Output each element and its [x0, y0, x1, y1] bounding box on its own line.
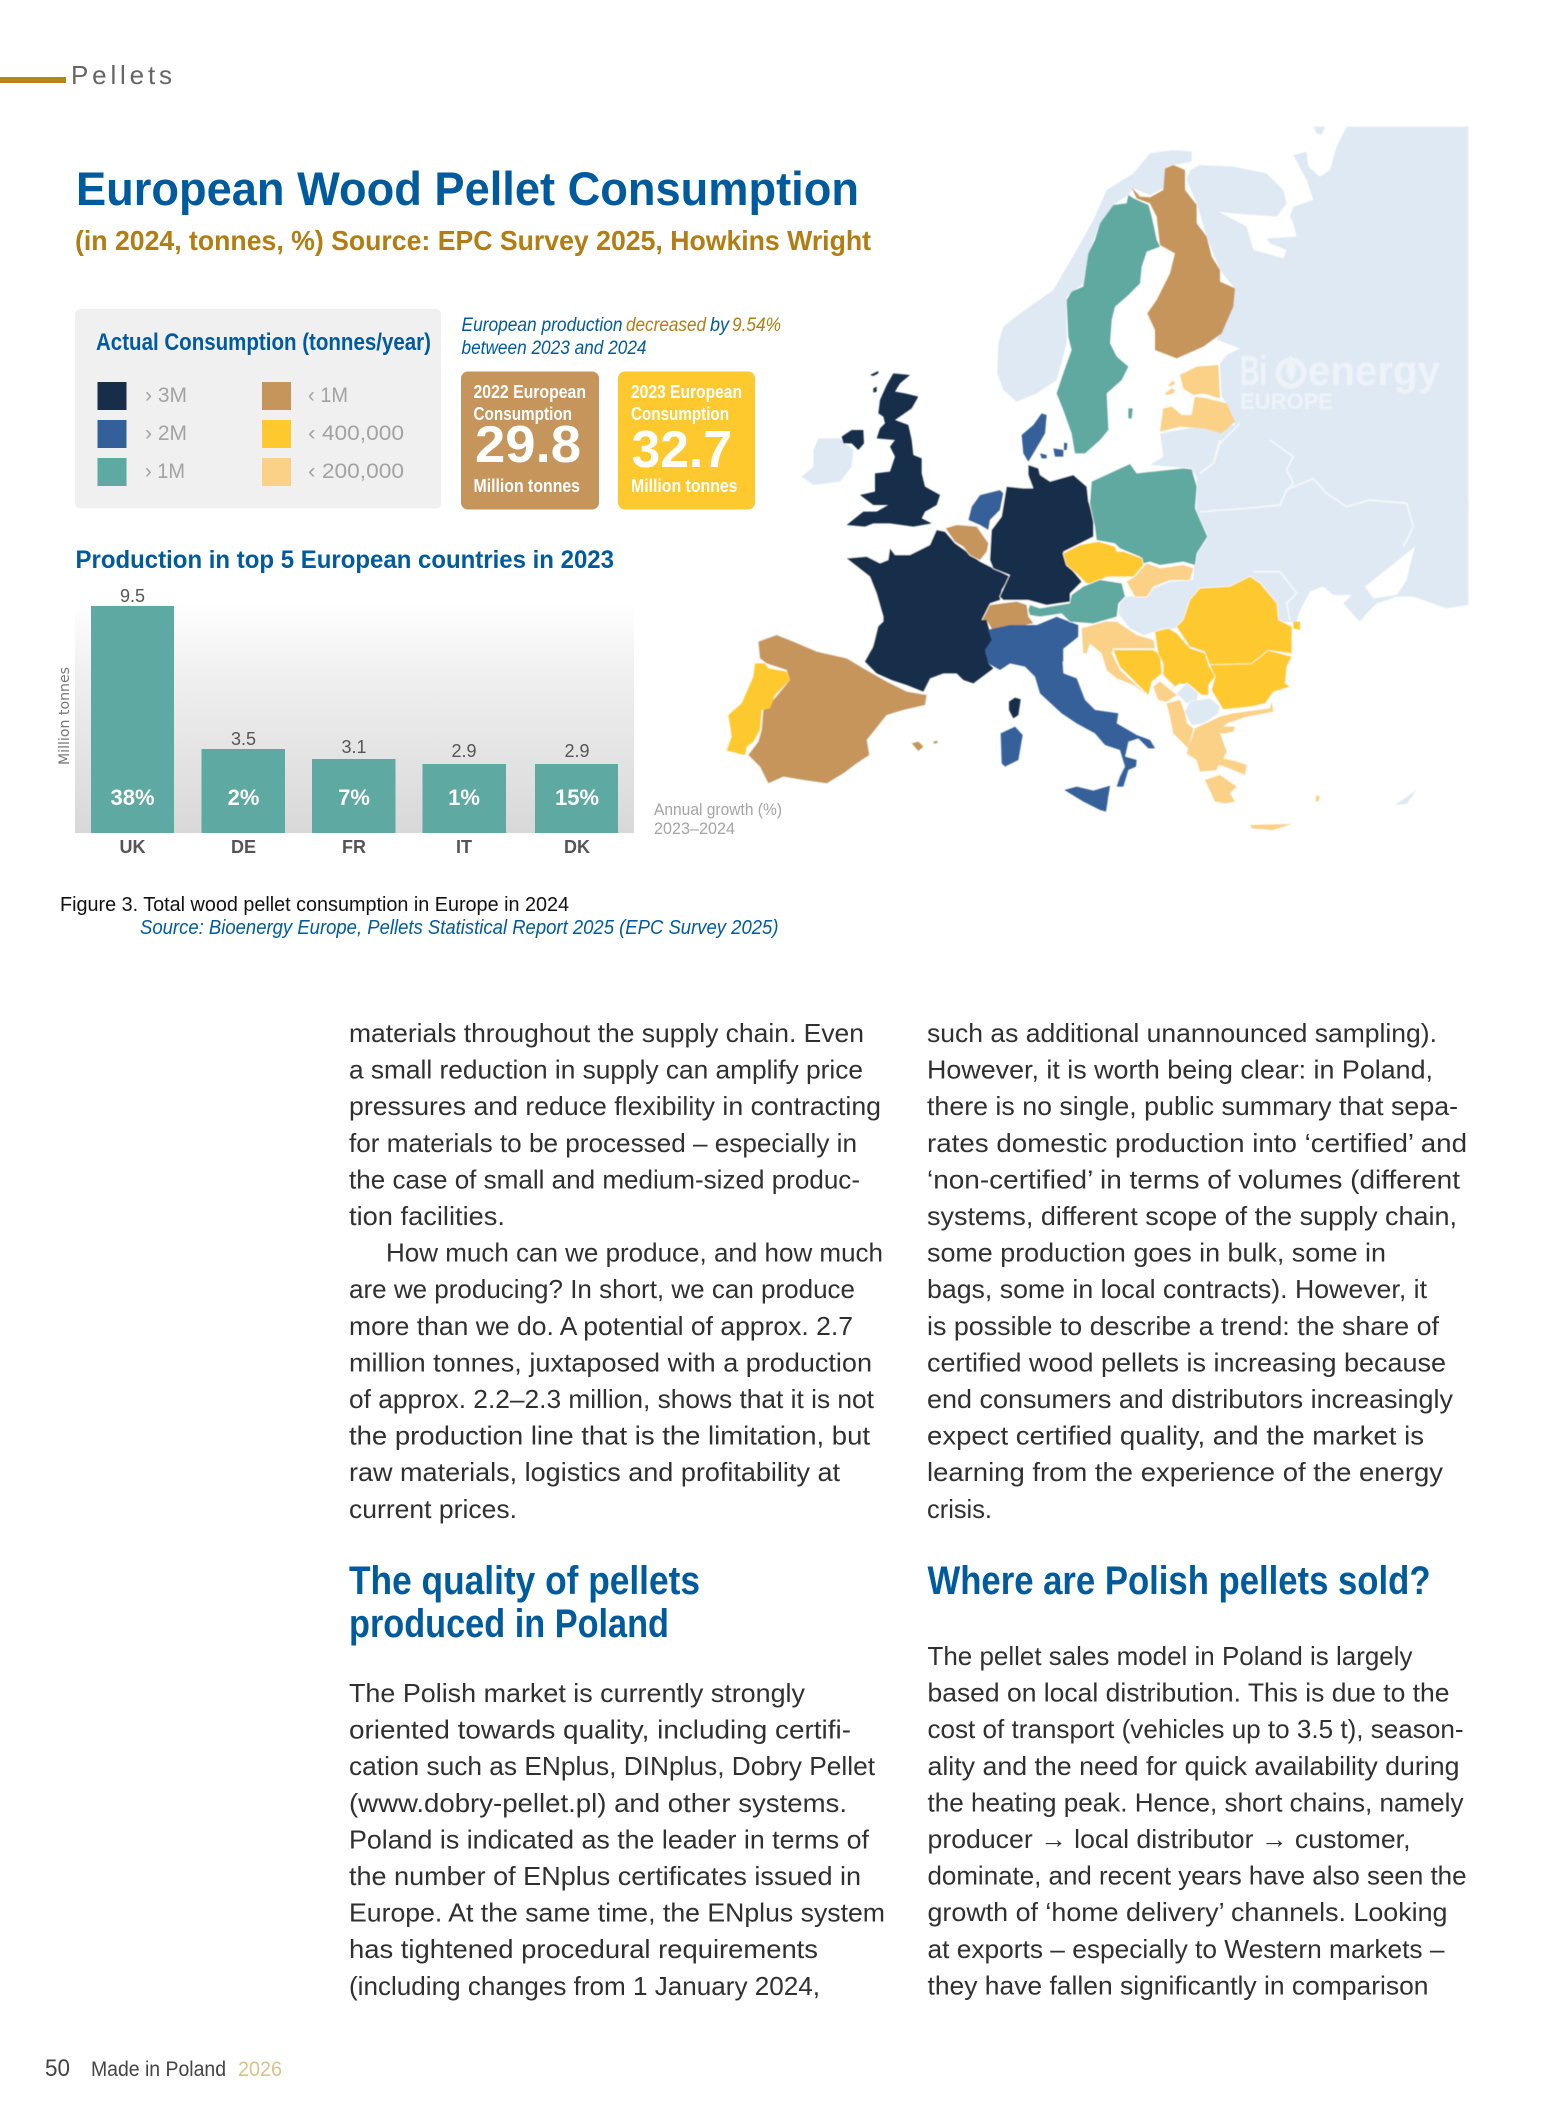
- text block: left column bottom: has tightened procedural requirements: [349, 1934, 818, 1964]
- legend item: under 200,000: [262, 458, 404, 486]
- country: Netherlands: [968, 490, 1003, 530]
- legend item: over 3M: [98, 382, 187, 410]
- text block: right column bottom: at exports – especially to Western markets –: [928, 1934, 1445, 1964]
- page footer: [45, 2055, 282, 2082]
- subtitle: (in 2024, tonnes, %) Source: EPC Survey 2025, Howkins Wright: [75, 225, 871, 256]
- production note: by: [710, 315, 730, 336]
- bar: UK: [91, 586, 174, 857]
- legend item: over 2M: [98, 420, 187, 448]
- page footer: Made in Poland: [91, 2058, 226, 2081]
- text block: right column bottom: they have fallen significantly in comparison: [928, 1970, 1428, 2000]
- country: Kosovo: [1177, 683, 1198, 703]
- text block: right column bottom: based on local distribution. This is due to the: [928, 1678, 1450, 1708]
- stat card: 2023 consumption: 2023 European: [631, 382, 742, 402]
- country: Greece: [1187, 702, 1320, 830]
- country: Latvia: [1160, 397, 1235, 433]
- production note: 9.54%: [732, 315, 781, 336]
- bar: IT: IT: [456, 837, 472, 857]
- text block: left column bottom: [349, 1678, 885, 2001]
- map of Europe: [727, 127, 1468, 830]
- stat card: 2023 consumption: Million tonnes: [631, 476, 738, 496]
- legend item: over 3M: › 3M: [145, 384, 187, 407]
- text block: right column bottom: growth of ‘home delivery’ channels. Looking: [928, 1897, 1448, 1927]
- text block: left column top: for materials to be processed – especially in: [349, 1128, 857, 1158]
- stat card: 2023 consumption: [618, 372, 755, 510]
- non-reporting countries: Norway: [997, 150, 1192, 402]
- chart note: annual growth: 2023–2024: [654, 819, 735, 838]
- text block: left column top: materials throughout the supply chain. Even: [349, 1018, 864, 1048]
- stat card: 2022 consumption: 2022 European: [474, 382, 586, 402]
- legend item: over 2M: › 2M: [145, 422, 187, 445]
- country: Switzerland: [980, 602, 1033, 635]
- figure source: Source: Bioenergy Europe, Pellets Statistical Report 2025 (EPC Survey 2025): [140, 917, 778, 939]
- figure caption: Figure 3. Total wood pellet consumption in Europe in 2024: [60, 894, 569, 916]
- watermark lines: Baltic borders: [1200, 423, 1240, 473]
- text block: left column bottom: the number of ENplus certificates issued in: [349, 1861, 861, 1891]
- text block: left column top: pressures and reduce flexibility in contracting: [349, 1091, 881, 1121]
- island: Cyprus: [1395, 790, 1417, 805]
- heading: quality of pellets: The quality of pellets: [349, 1559, 700, 1603]
- text block: right column top: some production goes in bulk, some in: [927, 1238, 1386, 1268]
- legend item: under 400,000: ‹ 400,000: [308, 422, 404, 445]
- text block: left column bottom: Europe. At the same time, the ENplus system: [349, 1898, 885, 1928]
- bar: DK: [535, 741, 618, 857]
- bar: DE: 3.5: [231, 729, 256, 749]
- text block: right column top: crisis.: [927, 1494, 992, 1524]
- country: United Kingdom: [842, 371, 940, 527]
- country: Belgium: [946, 525, 988, 560]
- country: Croatia: [1082, 622, 1155, 695]
- country: Albania: [1167, 700, 1193, 748]
- axis label: Million tonnes: [57, 667, 73, 765]
- bar: DK: 15%: [555, 785, 599, 810]
- logo watermark: Bioenergy Europe: Bi: [1240, 347, 1267, 394]
- central and south-eastern European countries: [1028, 464, 1300, 725]
- country: North Macedonia: [1185, 698, 1220, 725]
- text block: right column top: end consumers and distributors increasingly: [927, 1384, 1453, 1414]
- text block: right column top: certified wood pellets is increasing because: [927, 1347, 1446, 1377]
- text block: left column top: a small reduction in supply can amplify price: [349, 1055, 863, 1085]
- bar: FR: [312, 737, 396, 857]
- section header: Pellets: Pellets: [71, 60, 172, 90]
- legend item: over 1M: [98, 458, 185, 486]
- text block: left column top: How much can we produce, and how much: [386, 1238, 883, 1268]
- bar: IT: 1%: [448, 785, 480, 810]
- island: Corsica: [1009, 698, 1021, 718]
- text block: right column bottom: the heating peak. Hence, short chains, namely: [928, 1787, 1464, 1817]
- Sea of Azov and Crimea cut-out: [1365, 547, 1415, 598]
- country: Germany: [990, 465, 1093, 605]
- text block: left column bottom: oriented towards quality, including certifi-: [349, 1715, 851, 1745]
- island: Gotland: [1128, 408, 1133, 418]
- chart note: annual growth: [654, 800, 782, 838]
- production note: decreased: [626, 315, 707, 336]
- country: Spain: [748, 635, 927, 783]
- non-reporting countries: south-eastern block with Hungary: [1118, 500, 1468, 635]
- text block: right column bottom: producer → local distributor → customer,: [928, 1824, 1410, 1854]
- legend item: under 1M: [262, 382, 348, 410]
- text block: right column top: expect certified quality, and the market is: [927, 1421, 1424, 1451]
- southern Balkan countries: [1153, 682, 1417, 830]
- text block: left column bottom: The Polish market is currently strongly: [349, 1678, 805, 1708]
- text block: right column top: such as additional unannounced sampling).: [927, 1018, 1437, 1048]
- text block: right column bottom: ality and the need for quick availability during: [928, 1751, 1460, 1781]
- eastern border lines: [1200, 440, 1413, 620]
- text block: left column top: more than we do. A potential of approx. 2.7: [349, 1311, 853, 1341]
- text block: left column top: [349, 1018, 883, 1524]
- country: France: [847, 530, 1010, 662]
- country: Bosnia: [1113, 650, 1162, 695]
- title: European Wood Pellet Consumption: [76, 162, 859, 215]
- text block: left column bottom: cation such as ENplus, DINplus, Dobry Pellet: [349, 1751, 876, 1781]
- country: southern France: [865, 620, 993, 692]
- country: Italy peninsula: [985, 625, 1155, 787]
- bar: UK: 38%: [110, 785, 155, 810]
- heading: where pellets are sold: Where are Polish pellets sold?: [928, 1559, 1430, 1603]
- logo watermark: Bioenergy Europe: EUROPE: [1240, 389, 1333, 414]
- text block: left column top: of approx. 2.2–2.3 million, shows that it is not: [349, 1384, 875, 1414]
- bar: IT: 2.9: [451, 741, 477, 761]
- stat card: 2023 consumption: 32.7: [632, 421, 732, 479]
- text block: right column bottom: The pellet sales model in Poland is largely: [928, 1641, 1412, 1671]
- northern European countries: [1057, 165, 1240, 473]
- text block: right column top: is possible to describe a trend: the share of: [927, 1311, 1440, 1341]
- text block: left column top: current prices.: [349, 1494, 517, 1524]
- panel: consumption legend: [75, 309, 441, 508]
- country: Finland: [1132, 165, 1235, 358]
- text block: left column bottom: (including changes from 1 January 2024,: [349, 1971, 820, 2001]
- country: Poland: [1090, 464, 1207, 565]
- text block: right column top: However, it is worth being clear: in Poland,: [927, 1055, 1433, 1085]
- heading: quality of pellets: [349, 1559, 700, 1646]
- chart heading: Production in top 5 European countries in 2023: [76, 546, 614, 574]
- legend heading: Actual Consumption (tonnes/year): [96, 329, 431, 356]
- bar: DE: DE: [231, 837, 256, 857]
- text block: right column bottom: [928, 1641, 1466, 2000]
- page footer: 50: [45, 2055, 70, 2082]
- country: Czechia: [1063, 542, 1143, 583]
- south-western European countries: [727, 620, 1155, 812]
- text block: right column bottom: cost of transport (vehicles up to 3.5 t), season-: [928, 1714, 1464, 1744]
- island: Sardinia: [1001, 727, 1023, 767]
- bar chart: production by country: [57, 586, 634, 857]
- bar: DE: [202, 729, 285, 857]
- legend item: over 1M: › 1M: [145, 460, 185, 483]
- page footer: 2026: [238, 2058, 282, 2081]
- country: Ireland: [802, 438, 853, 485]
- stat card: 2023 consumption: Consumption: [631, 404, 729, 424]
- bar: DK: 2.9: [564, 741, 590, 761]
- logo watermark: Bioenergy Europe: [1240, 347, 1441, 414]
- text block: left column top: million tonnes, juxtaposed with a production: [349, 1347, 872, 1377]
- bar: DK: DK: [564, 837, 590, 857]
- production note: European production: [462, 315, 622, 336]
- production note: [462, 315, 781, 359]
- text block: right column top: learning from the experience of the energy: [927, 1457, 1443, 1487]
- chart note: annual growth: Annual growth (%): [654, 800, 782, 819]
- stat card: 2022 consumption: 29.8: [475, 416, 581, 474]
- text block: right column top: rates domestic production into ‘certified’ and: [927, 1128, 1467, 1158]
- country: Denmark: [1022, 413, 1067, 462]
- islands: Balearics: [912, 741, 937, 751]
- text block: right column bottom: dominate, and recent years have also seen the: [928, 1861, 1466, 1891]
- production note: between 2023 and 2024: [462, 338, 646, 359]
- country: northern Italy: [986, 617, 1078, 662]
- text block: left column top: tion facilities.: [349, 1201, 505, 1231]
- heading: quality of pellets: produced in Poland: [349, 1602, 669, 1646]
- text block: right column top: systems, different scope of the supply chain,: [927, 1201, 1457, 1231]
- island: Sicily: [1064, 786, 1110, 812]
- non-reporting countries: north-eastern block: [1150, 127, 1468, 510]
- text block: right column top: bags, some in local contracts). However, it: [927, 1274, 1428, 1304]
- legend item: under 1M: ‹ 1M: [308, 384, 348, 407]
- country: Serbia: [1155, 628, 1215, 695]
- stat card: 2022 consumption: Million tonnes: [474, 476, 580, 496]
- country: Slovakia: [1127, 563, 1193, 597]
- country: Estonia: [1165, 365, 1220, 398]
- text block: left column bottom: Poland is indicated as the leader in terms of: [349, 1824, 870, 1854]
- section header: Pellets: [0, 60, 172, 90]
- legend item: under 400,000: [262, 420, 404, 448]
- text block: left column top: the production line that is the limitation, but: [349, 1421, 871, 1451]
- text block: right column top: there is no single, public summary that sepa-: [927, 1091, 1458, 1121]
- western European countries: [802, 371, 1093, 662]
- bar: IT: [422, 741, 506, 857]
- stat card: 2022 consumption: Consumption: [474, 404, 572, 424]
- country: Austria: [1028, 580, 1125, 623]
- country: Montenegro: [1153, 682, 1177, 702]
- country: Romania: [1177, 577, 1292, 665]
- text block: left column bottom: (www.dobry-pellet.pl) and other systems.: [349, 1788, 847, 1818]
- legend item: under 200,000: ‹ 200,000: [308, 460, 404, 483]
- text block: left column top: raw materials, logistics and profitability at: [349, 1457, 841, 1487]
- stat card: 2022 consumption: [461, 372, 599, 510]
- bar: UK: UK: [120, 837, 146, 857]
- logo watermark: Bioenergy Europe: energy: [1308, 347, 1441, 394]
- country: Portugal: [727, 663, 790, 755]
- text block: left column top: are we producing? In short, we can produce: [349, 1274, 855, 1304]
- country: Bulgaria: [1210, 651, 1292, 709]
- text block: left column top: the case of small and medium-sized produc-: [349, 1164, 860, 1194]
- country: Sweden: [1057, 195, 1160, 453]
- bar: FR: 3.1: [341, 737, 367, 757]
- bar: DE: 2%: [228, 785, 259, 810]
- bar: FR: FR: [342, 837, 366, 857]
- text block: right column top: ‘non-certified’ in terms of volumes (different: [927, 1164, 1461, 1194]
- bar: FR: 7%: [338, 785, 370, 810]
- text block: right column top: [927, 1018, 1467, 1524]
- bar: UK: 9.5: [120, 586, 145, 606]
